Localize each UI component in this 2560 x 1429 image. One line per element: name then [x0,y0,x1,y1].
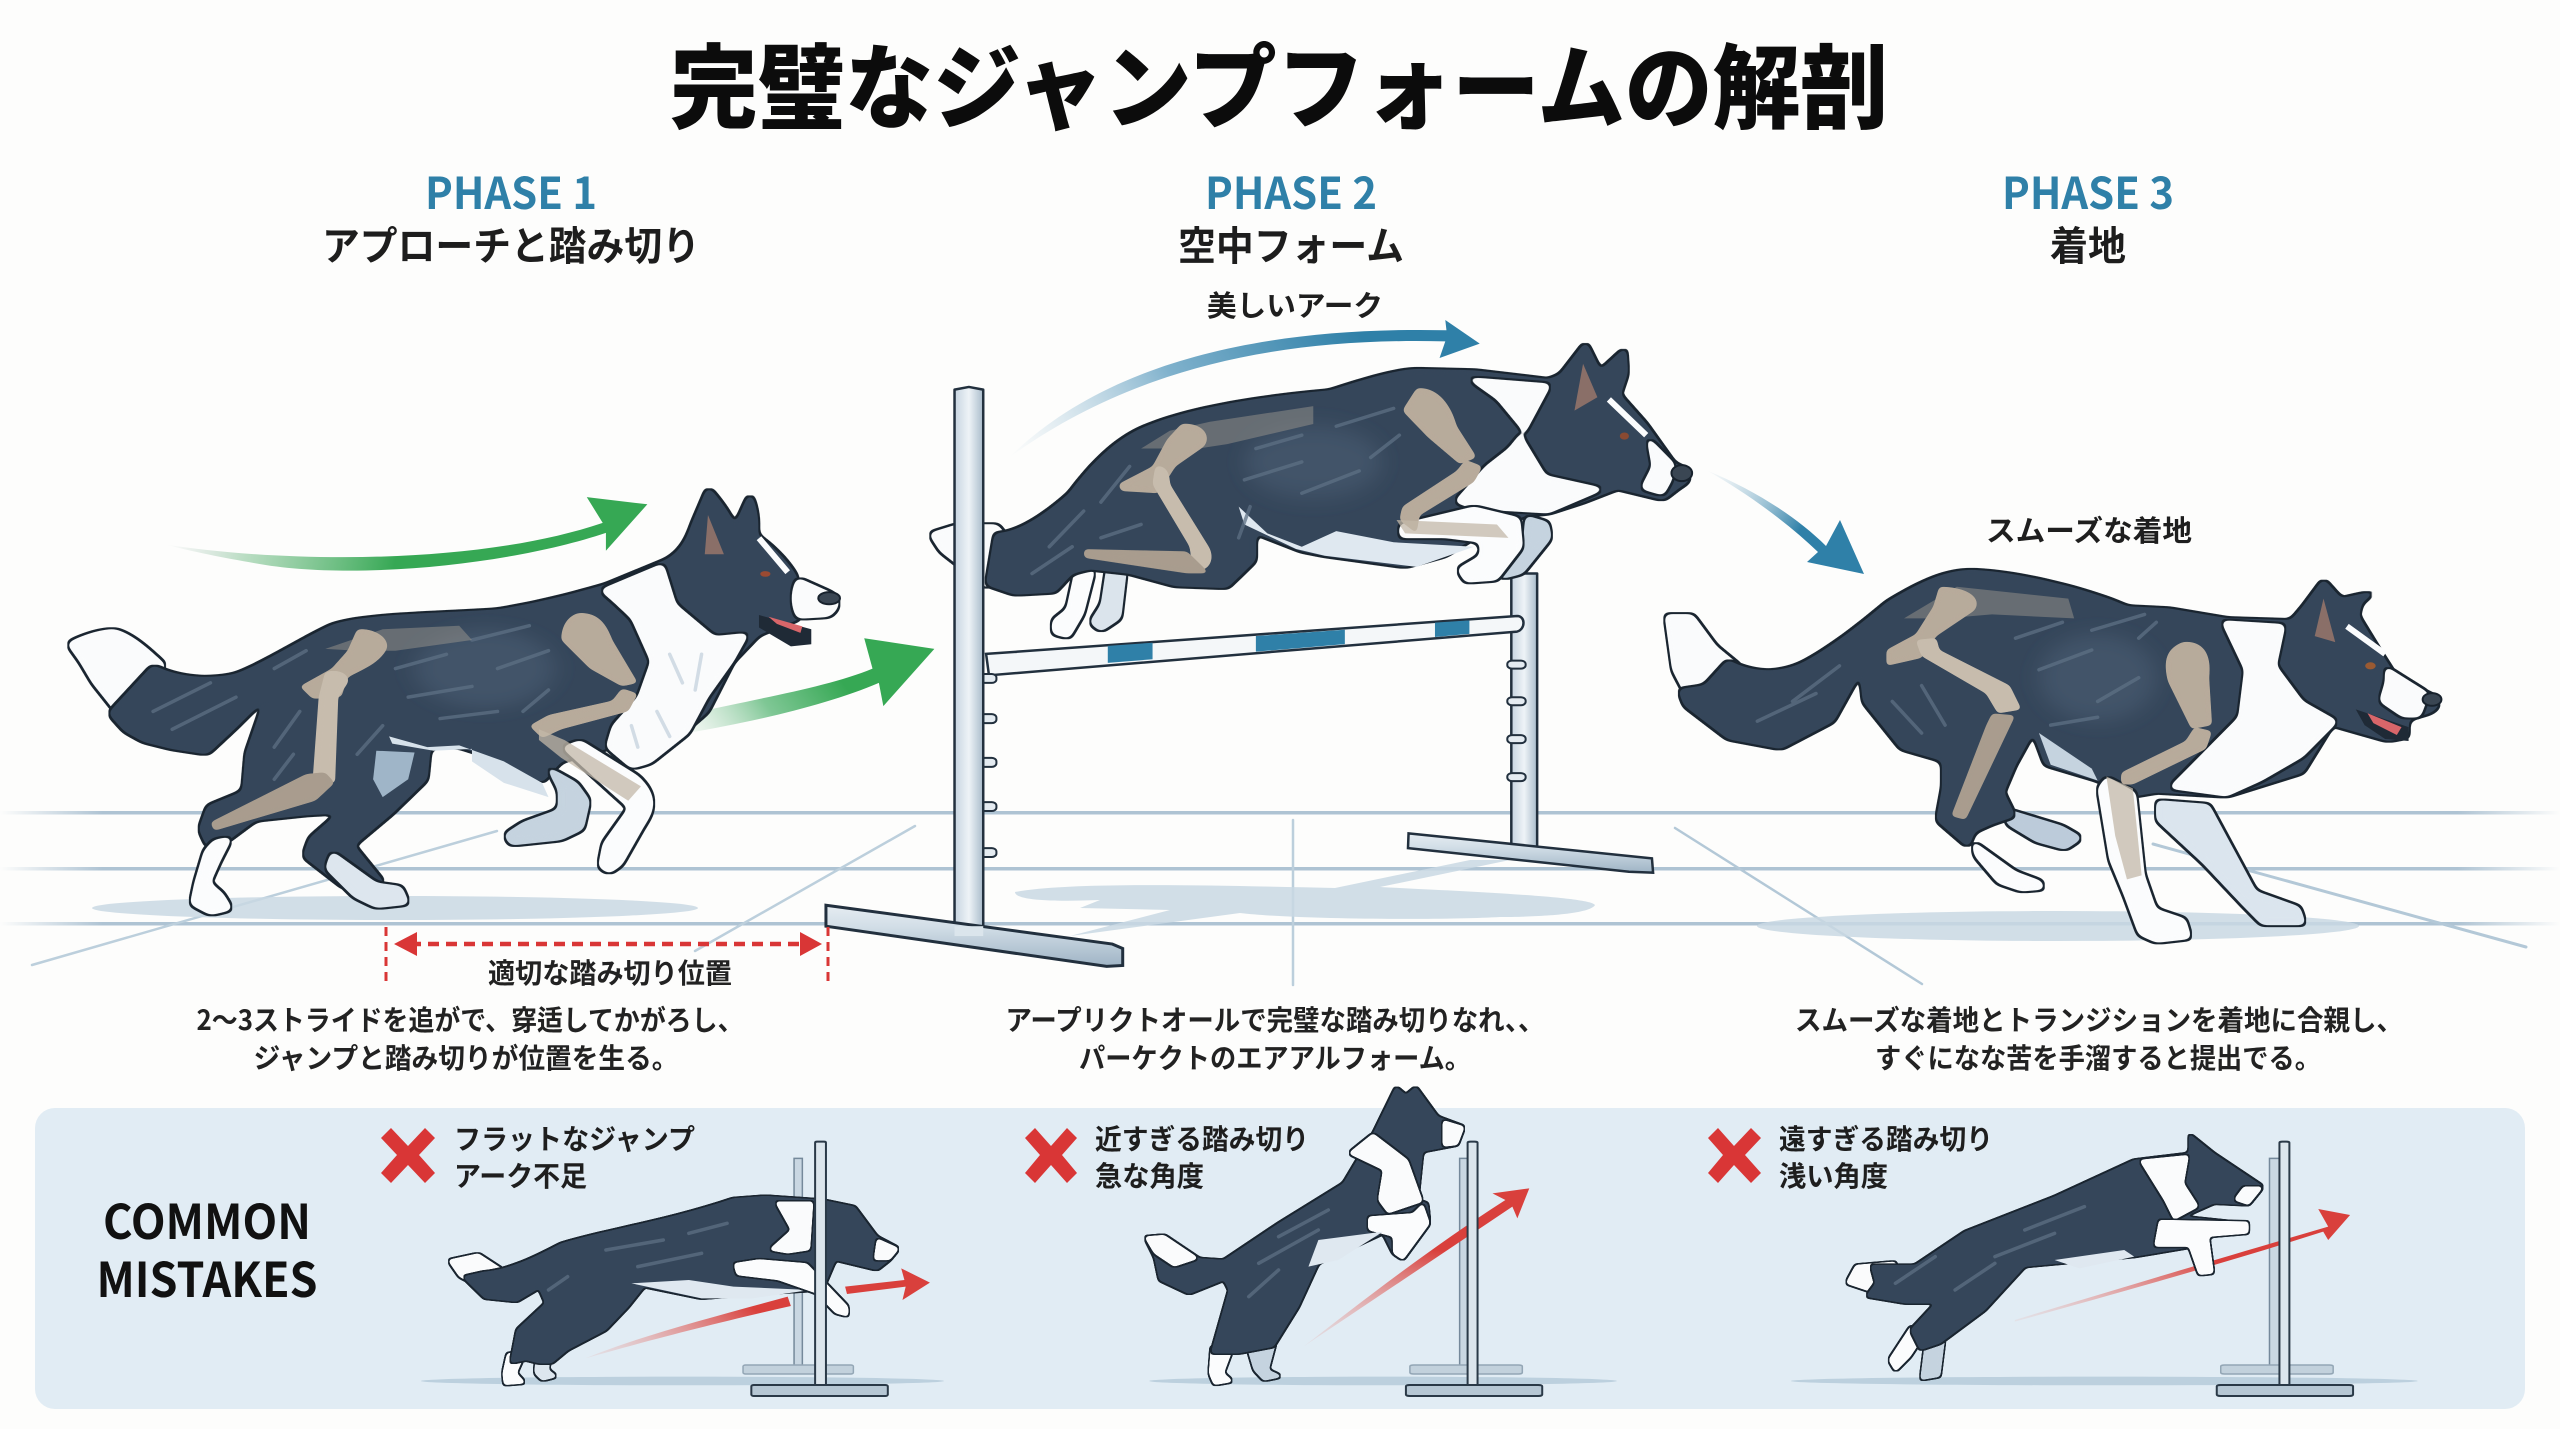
mistake 2 label [1095,1118,1309,1195]
mistake 3 illustration: too far, shallow [1791,1133,2418,1396]
mistake 1 illustration: flat jump [421,1142,944,1396]
description: phase 1 [196,999,744,1077]
mistake 3 label: 遠すぎる踏み切り [1779,1118,1993,1158]
label: smooth landing: スムーズな着地 [1986,508,2192,550]
panel heading: MISTAKES [96,1241,318,1311]
description: phase 1: 2〜3ストライドを追がで、穿适してかがろし、 [196,999,744,1039]
label: beautiful arc: 美しいアーク [1207,283,1383,325]
callout: takeoff zone dimension: 適切な踏み切り位置 [488,952,732,992]
phase 1 heading: アプローチと踏み切り [322,214,700,272]
description: phase 1: ジャンプと踏み切りが位置を生る。 [254,1037,678,1077]
mistake 3 label: 浅い角度 [1779,1155,1888,1195]
phase 3 heading: PHASE 3 [2002,158,2174,222]
mistake 2 illustration: too close, steep [1144,1087,1617,1396]
phase 2 heading: PHASE 2 [1205,158,1377,222]
mistake 1 label: アーク不足 [454,1155,587,1195]
phase 3 heading [2002,158,2174,272]
arrow: green upper approach [166,497,647,571]
title: 完璧なジャンプフォームの解剖 [670,15,1888,148]
hurdle: back post and crossbar [986,574,1653,873]
description: phase 3: スムーズな着地とトランジションを着地に合親し、 [1795,999,2403,1039]
arrow: blue arc [1009,320,1480,457]
panel heading [96,1183,318,1311]
floor shadow: phase 1 [92,896,698,920]
floor shadow: phase 3 [1757,911,2359,941]
description: phase 2: パーケクトのエアアルフォーム。 [1079,1037,1471,1077]
mistake 3 label [1779,1118,1993,1195]
phase 1 heading [322,158,700,272]
arrow: green lower approach [688,638,934,733]
icon: red cross 2 [1025,1128,1077,1183]
phase 2 heading: 空中フォーム [1178,214,1404,272]
description: phase 2 [1006,999,1544,1077]
description: phase 3 [1795,999,2403,1077]
panel background [35,1108,2525,1409]
floor shadow: phase 2 [1015,860,1595,936]
description: phase 3: すぐになな苦を手溜すると提出でる。 [1875,1037,2321,1077]
panel: common mistakes [35,1087,2525,1409]
phase 3 heading: 着地 [2050,214,2126,272]
callout: takeoff zone dimension [386,927,828,992]
mistake 1 label [454,1118,695,1195]
dog: phase 1 approach with skeleton [67,486,840,915]
mistake 1 label: フラットなジャンプ [454,1118,695,1158]
dog: phase 3 landing with skeleton [1665,570,2441,943]
icon: red cross 3 [1708,1128,1761,1183]
icon: red cross 1 [381,1128,435,1183]
description: phase 2: アープリクトオールで完璧な踏み切りなれ、、 [1006,999,1544,1039]
panel heading: COMMON [103,1183,311,1253]
arrow: blue descent [1708,471,1864,574]
mistake 2 label: 急な角度 [1095,1155,1204,1195]
mistake 2 label: 近すぎる踏み切り [1095,1118,1309,1158]
hurdle: front post and base [826,387,1123,966]
dog: phase 2 mid-air with skeleton [929,341,1692,638]
floor grid [0,811,2560,985]
phase 2 heading [1178,158,1404,272]
phase 1 heading: PHASE 1 [425,158,597,222]
